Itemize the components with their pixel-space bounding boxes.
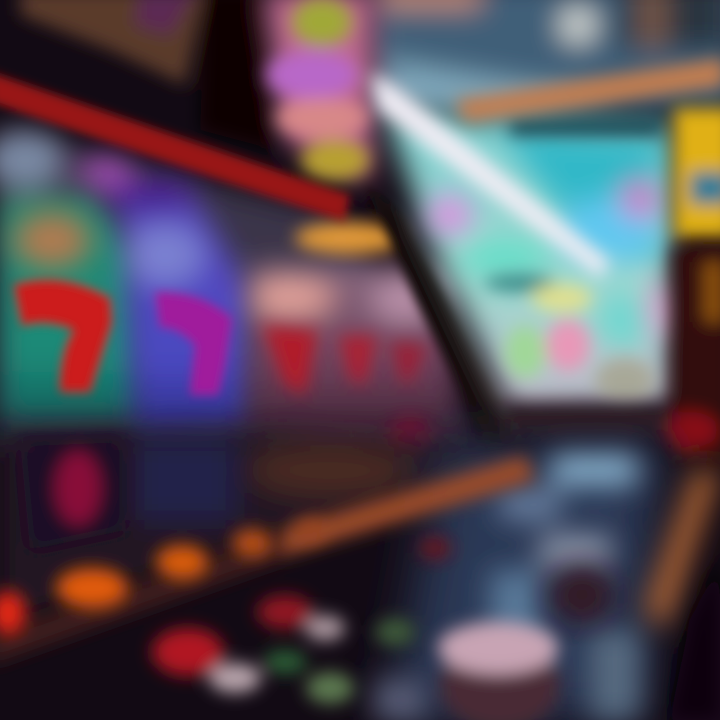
right orange rail [645, 470, 720, 630]
right dark red column [505, 245, 720, 460]
green panel top glow [14, 212, 90, 268]
dark diagonal frame [365, 185, 525, 450]
orange counter bar [0, 455, 535, 665]
green reel panel [0, 132, 140, 425]
red seven symbol [14, 280, 112, 392]
dark stool [550, 566, 614, 622]
blue reel panel [77, 158, 250, 435]
floor right [390, 440, 665, 720]
dark seven box [20, 435, 125, 550]
right bottom dark corner [670, 560, 720, 720]
lower buttons [152, 536, 451, 704]
middle reels [248, 265, 455, 445]
lower machine panel [0, 430, 520, 625]
right screen [385, 115, 672, 410]
red diagonal bar [0, 72, 350, 222]
top left brown panel [20, 0, 275, 150]
purple seven symbol [155, 292, 232, 395]
top right ceiling [370, 0, 720, 120]
round table [438, 622, 560, 720]
right yellow sign [674, 108, 720, 238]
main reel housing [0, 130, 470, 450]
orange reel top glow [295, 222, 405, 254]
white light beam [370, 72, 610, 278]
top colourful panel [262, 0, 375, 185]
red reel symbols [262, 325, 432, 460]
orange ceiling beam [455, 58, 720, 122]
floor highlights [375, 455, 640, 720]
button lights [0, 518, 326, 635]
